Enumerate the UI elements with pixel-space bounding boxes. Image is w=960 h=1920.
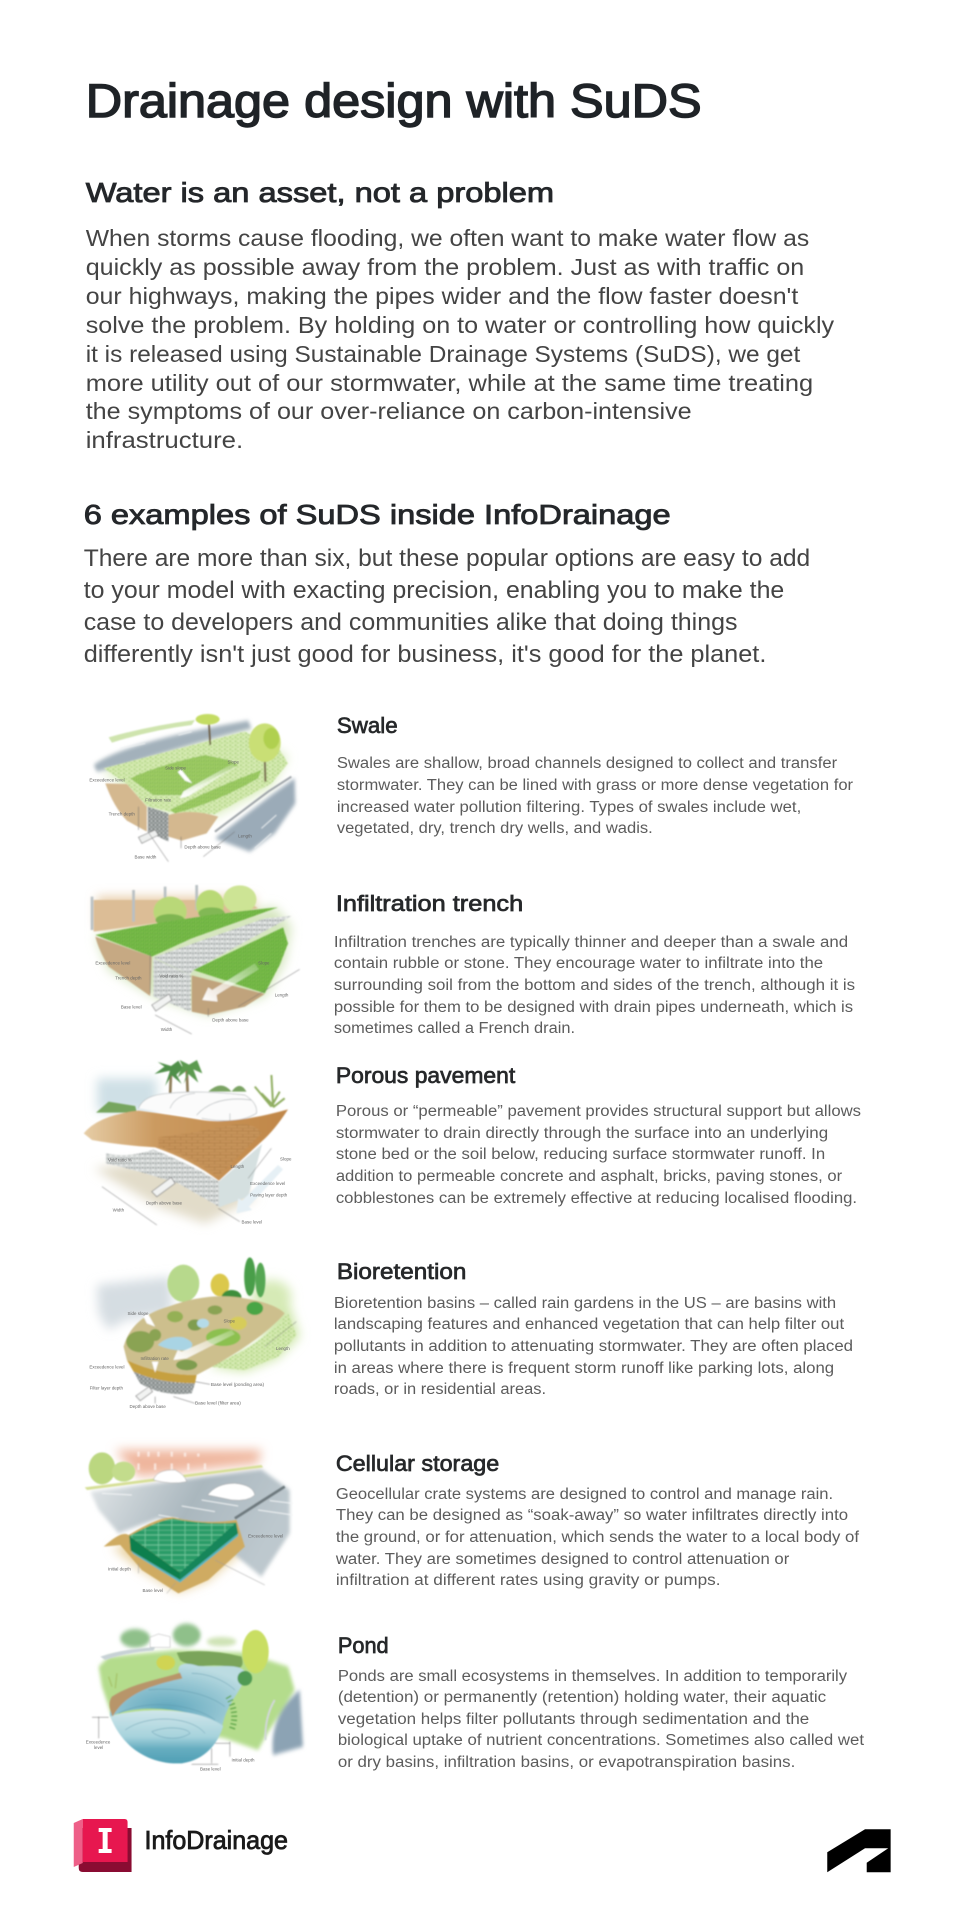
text block: bioretention: Bioretention basins – called rain gardens in the US – are basins with (334, 1295, 836, 1312)
text block: bioretention: pollutants in addition to attenuating stormwater. They are often placed (334, 1338, 853, 1355)
illustration: bioretention (89, 1257, 300, 1409)
illustration: swale (89, 714, 295, 862)
panel: pond (86, 1624, 865, 1771)
illustration: bioretention: Slope (224, 1319, 236, 1324)
text block: infiltration trench: contain rubble or stone. They encourage water to infiltrate into the (334, 955, 823, 972)
text block: examples intro: to your model with exacting precision, enabling you to make the (84, 577, 784, 604)
illustration: porous pavement: Exceedence level (250, 1181, 285, 1186)
illustration: swale: Length (238, 833, 252, 838)
text block: examples intro: There are more than six, but these popular options are easy to add (84, 545, 810, 572)
illustration: infiltration trench: Width (161, 1027, 173, 1032)
text block: infiltration trench: possible for them to be designed with drain pipes underneath, which is (334, 999, 853, 1016)
illustration: infiltration trench: Exceedence level (95, 960, 130, 965)
text block: infiltration trench (334, 934, 855, 1037)
heading: 6 examples: 6 examples of SuDS inside InfoDrainage (84, 499, 671, 530)
text block: bioretention: landscaping features and enhanced vegetation that can help filter out (334, 1316, 845, 1333)
illustration: infiltration trench: Slope (258, 960, 270, 965)
illustration: bioretention: Side slope (128, 1311, 149, 1316)
illustration: bioretention: Depth above base (130, 1404, 166, 1409)
text block: infiltration trench: Infiltration trenches are typically thinner and deeper than a swale and (334, 934, 848, 951)
logo: Autodesk (827, 1829, 891, 1872)
illustration: swale: Side slope (165, 766, 187, 771)
illustration: infiltration trench: Depth above base (212, 1017, 249, 1022)
illustration: bioretention: Base level (filter area) (195, 1401, 241, 1406)
illustration: bioretention: Infiltration rate (141, 1356, 169, 1361)
illustration: swale: Slope (228, 760, 240, 765)
text block: introduction: our highways, making the pipes wider and the flow faster doesn't (86, 283, 799, 309)
panel: bioretention (89, 1257, 853, 1409)
text block: cellular storage (335, 1486, 860, 1589)
text block: pond: (detention) or permanently (retention) holding water, their aquatic (338, 1689, 826, 1706)
text block: porous pavement (336, 1103, 861, 1207)
illustration: pond (86, 1624, 303, 1771)
text block: cellular storage: Geocellular crate systems are designed to control and manage rain. (336, 1486, 833, 1503)
heading: bioretention: Bioretention (337, 1259, 466, 1284)
panel: cellular storage (85, 1450, 860, 1593)
title: Drainage design with SuDS (86, 75, 702, 127)
text block: infiltration trench: surrounding soil from the bottom and sides of the trench, although it is (334, 977, 855, 994)
text block: porous pavement: stone bed or the soil below, reducing surface stormwater runoff. In (336, 1146, 825, 1163)
illustration: porous pavement: Void ratio % (108, 1158, 132, 1163)
icon: InfoDrainage mark (74, 1819, 132, 1872)
illustration: swale: Trench depth (109, 812, 135, 817)
illustration: swale: Exceedence level (89, 777, 125, 782)
text block: introduction: quickly as possible away from the problem. Just as with traffic on (86, 254, 804, 280)
panel: infiltration trench (92, 885, 855, 1037)
illustration: bioretention: Base level (ponding area) (211, 1382, 265, 1387)
illustration: pond: Base level (200, 1766, 221, 1771)
illustration: pond: level (94, 1745, 103, 1750)
illustration: infiltration trench: Trench depth (115, 975, 142, 980)
text block: swale: Swales are shallow, broad channels designed to collect and transfer (337, 755, 837, 772)
text block: pond: vegetation helps filter pollutants through sedimentation and the (338, 1711, 809, 1728)
heading: cellular storage: Cellular storage (336, 1451, 499, 1476)
text block: cellular storage: water. They are sometimes designed to control attenuation or (335, 1551, 789, 1568)
text block: bioretention: in areas where there is frequent storm runoff like parking lots, along (334, 1360, 834, 1377)
illustration: porous pavement: Slope (280, 1157, 292, 1162)
text block: porous pavement: cobblestones can be extremely effective at reducing localised flooding. (336, 1190, 857, 1207)
text block: examples intro: differently isn't just good for business, it's good for the planet. (84, 641, 766, 668)
text block: cellular storage: infiltration at different rates using gravity or pumps. (336, 1572, 721, 1589)
text block: introduction: solve the problem. By holding on to water or controlling how quickly (86, 312, 834, 338)
illustration: pond: Exceedence (86, 1739, 111, 1744)
text block: pond: or dry basins, infiltration basins, or evapotranspiration basins. (338, 1754, 795, 1771)
text block: bioretention (334, 1295, 853, 1398)
illustration: infiltration trench: Void ratio % (159, 974, 183, 979)
panel: porous pavement (84, 1060, 861, 1225)
illustration: cellular storage: Exceedence level (248, 1534, 283, 1539)
illustration: bioretention: Length (276, 1346, 290, 1351)
text block: swale: increased water pollution filtering. Types of swales include wet, (337, 799, 801, 816)
illustration: cellular storage: Base level (143, 1588, 163, 1593)
text block: introduction: more utility out of our stormwater, while at the same time treating (86, 370, 813, 396)
illustration: infiltration trench: Base level (121, 1004, 142, 1009)
text block: pond: biological uptake of nutrient concentrations. Sometimes also called wet (338, 1732, 865, 1749)
illustration: cellular storage: Initial depth (108, 1567, 131, 1572)
illustration: porous pavement: Base level (242, 1220, 262, 1225)
text block: cellular storage: the ground, or for attenuation, which sends the water to a local body of (336, 1529, 860, 1546)
text block: porous pavement: addition to permeable concrete and asphalt, bricks, paving stones, or (336, 1168, 842, 1185)
text block: pond: Ponds are small ecosystems in themselves. In addition to temporarily (338, 1668, 847, 1685)
text block: swale: stormwater. They can be lined with grass or more dense vegetation for (337, 777, 853, 794)
illustration: porous pavement: Length (231, 1164, 245, 1169)
illustration: infiltration trench: Length (275, 992, 289, 997)
text block: porous pavement: Porous or “permeable” pavement provides structural support but allows (336, 1103, 861, 1120)
text block: pond (338, 1668, 865, 1771)
illustration: swale: Base width (135, 855, 157, 860)
heading: water is an asset: Water is an asset, not a problem (86, 177, 554, 208)
text block: infiltration trench: sometimes called a French drain. (334, 1020, 575, 1037)
illustration: porous pavement: Width (113, 1207, 125, 1212)
heading: infiltration trench: Infiltration trench (336, 891, 523, 916)
text block: introduction: When storms cause flooding, we often want to make water flow as (86, 225, 809, 251)
illustration: cellular storage (85, 1450, 293, 1593)
illustration: porous pavement (84, 1060, 292, 1225)
text block: introduction: it is released using Sustainable Drainage Systems (SuDS), we get (86, 341, 801, 367)
text block: cellular storage: They can be designed as “soak-away” so water infiltrates directly into (336, 1507, 848, 1524)
text block: introduction: the symptoms of our over-reliance on carbon-intensive (86, 398, 692, 424)
text block: swale (337, 755, 853, 837)
text block: introduction: infrastructure. (86, 427, 243, 453)
text block: porous pavement: stormwater to drain directly through the surface into an underlying (336, 1125, 828, 1142)
text block: bioretention: roads, or in residential areas. (334, 1381, 546, 1398)
illustration: porous pavement: Paving layer depth (250, 1192, 288, 1197)
text block: introduction (86, 225, 834, 453)
illustration: swale: Depth above base (184, 844, 221, 849)
logo: InfoDrainage (74, 1819, 288, 1872)
text block: swale: vegetated, dry, trench dry wells, and wadis. (337, 820, 653, 837)
illustration: swale: Filtration rate (145, 797, 172, 802)
illustration: bioretention: Filter layer depth (90, 1385, 124, 1390)
wordmark: InfoDrainage (145, 1827, 288, 1855)
text block: examples intro: case to developers and communities alike that doing things (84, 609, 737, 636)
text block: examples intro (84, 545, 810, 668)
illustration: bioretention: Exceedence level (89, 1364, 124, 1369)
heading: pond: Pond (338, 1633, 389, 1658)
illustration: porous pavement: Depth above base (146, 1201, 183, 1206)
panel: swale (89, 713, 853, 862)
heading: swale: Swale (337, 713, 398, 738)
illustration: pond: Initial depth (232, 1757, 255, 1762)
heading: porous pavement: Porous pavement (336, 1063, 515, 1088)
illustration: infiltration trench (92, 885, 300, 1034)
